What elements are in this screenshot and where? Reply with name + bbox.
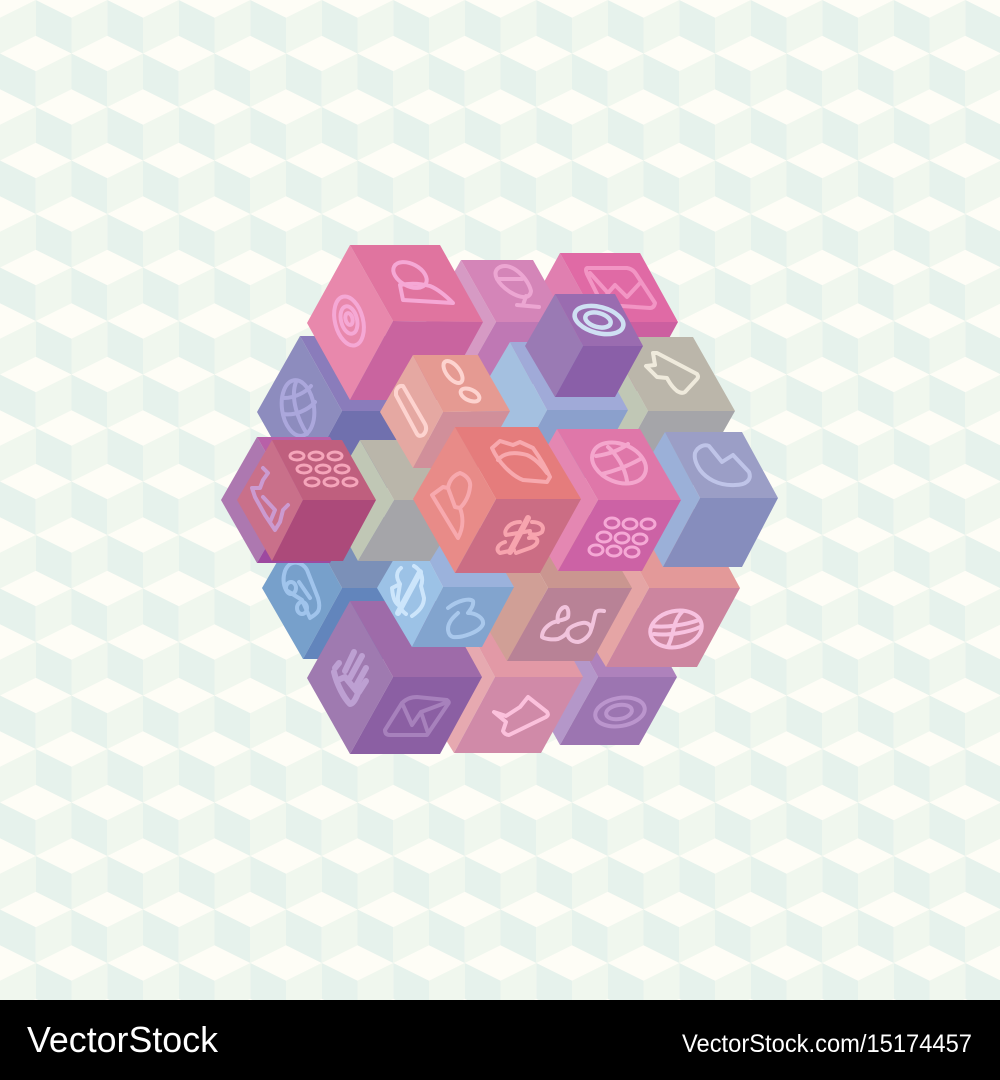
cube: pink right with globe and keypad bbox=[517, 429, 681, 571]
cube: red with keypad and squiggle bbox=[237, 440, 376, 561]
cube: big purple with hand and envelope bbox=[307, 601, 482, 754]
cube: central coral with B, lips and dollar bbox=[413, 427, 581, 573]
footer brand: VectorStock bbox=[27, 1019, 219, 1060]
cube: magenta envelope bbox=[522, 253, 678, 391]
footer url: VectorStock.com/15174457 bbox=[682, 1030, 972, 1058]
cube: taupe with arrow bbox=[565, 337, 735, 485]
cube: lower pink with arrow bbox=[407, 601, 583, 753]
cube: blue lower left with car bbox=[262, 517, 424, 659]
cube cluster bbox=[221, 245, 778, 754]
cube: pink purple glass bbox=[426, 260, 568, 384]
cube: right blue with G shape bbox=[626, 432, 778, 567]
footer bar bbox=[0, 1000, 1000, 1080]
cube: big pink with eye and person bbox=[307, 245, 483, 400]
cube: light blue with cross and numeral bbox=[377, 528, 514, 647]
cube: purple behind red bbox=[221, 437, 368, 563]
cube: grey green bbox=[325, 440, 468, 561]
cube: lower purple with spiral bbox=[522, 608, 677, 745]
cube: salmon with ovals bbox=[380, 355, 510, 468]
cube: tan with glasses bbox=[464, 515, 632, 661]
cube: light blue bbox=[470, 342, 628, 478]
cube: blue purple globe bbox=[257, 336, 432, 488]
cube: salmon pink with globe bbox=[558, 509, 740, 667]
cube: small purple with target bbox=[525, 294, 643, 397]
